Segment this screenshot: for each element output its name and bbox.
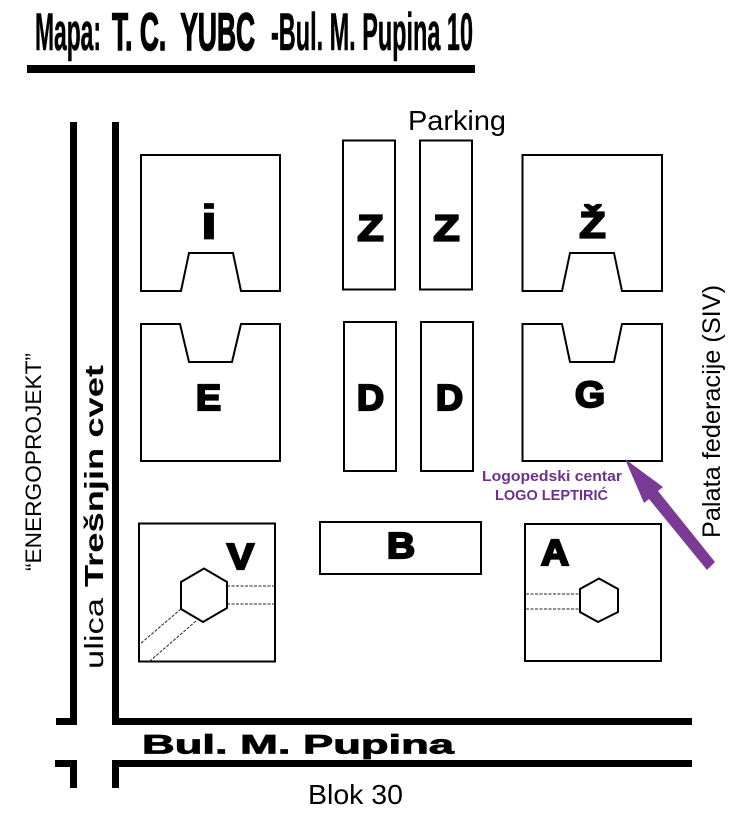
building B — [320, 522, 481, 574]
building E: E — [196, 377, 221, 418]
building D left — [344, 322, 396, 471]
building Ž: Ž — [580, 204, 606, 246]
callout: Logopedski centar: Logopedski centar — [482, 468, 622, 485]
building V — [139, 524, 275, 662]
building i: i — [200, 196, 218, 250]
building A — [525, 524, 661, 661]
building V: V — [227, 536, 254, 577]
building D right — [421, 322, 473, 471]
label: Bul. M. Pupina: Bul. M. Pupina — [142, 730, 456, 760]
label: ulica Trešnjin cvet: ulica — [79, 597, 109, 669]
label: ulica Trešnjin cvet — [79, 365, 109, 669]
building E — [141, 324, 280, 461]
label: Palata federacije (SIV): Palata federacije (SIV) — [698, 285, 726, 538]
building A: A — [541, 532, 569, 573]
building G — [522, 324, 662, 461]
title — [35, 3, 473, 62]
label: Parking: Parking — [408, 105, 506, 136]
arrow to Logopedski centar — [625, 459, 715, 570]
callout: Logopedski centar — [482, 468, 622, 504]
title: T. C. YUBC — [112, 3, 255, 62]
building Z right — [420, 140, 472, 290]
title: Mapa: — [35, 3, 101, 62]
text: -Bul. M. Pupina 10 — [271, 3, 473, 62]
label: ulica Trešnjin cvet: Trešnjin cvet — [79, 365, 109, 587]
building Z left — [343, 140, 395, 290]
building Z right: Z — [434, 208, 460, 248]
building G: G — [575, 374, 605, 415]
building i — [141, 155, 280, 291]
building Ž — [522, 155, 662, 291]
building D left: D — [357, 377, 384, 418]
callout: Logopedski centar: LOGO LEPTIRIĆ — [495, 486, 608, 504]
building Z left: Z — [358, 208, 384, 248]
label: Blok 30: Blok 30 — [308, 779, 403, 810]
label: ENERGOPROJEKT: “ENERGOPROJEKT” — [21, 353, 46, 571]
title underline — [27, 65, 475, 73]
roads: street outlines — [55, 122, 692, 788]
building B: B — [387, 525, 415, 566]
building D right: D — [436, 377, 463, 418]
